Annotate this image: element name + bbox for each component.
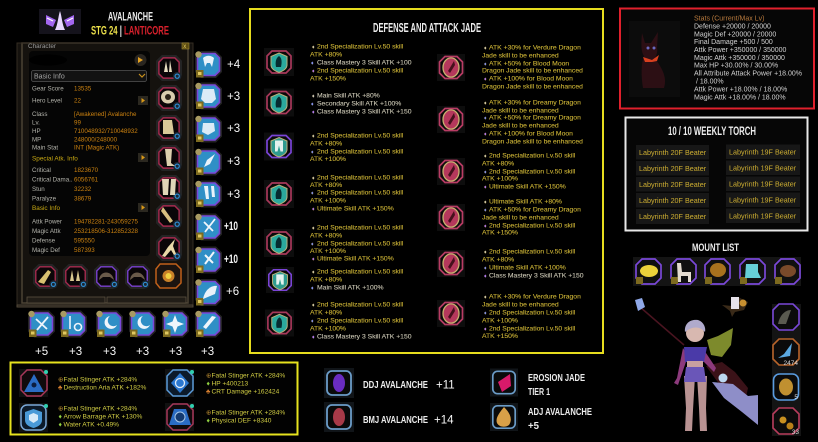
card 3: CRT Damage +162424 (212, 388, 280, 396)
jade left 7: ATK +80% (310, 310, 342, 316)
torso (684, 347, 707, 362)
enhancement levels row: +3 (136, 346, 149, 358)
stats list: 710048932/710048932 (74, 128, 138, 135)
jade left 1: ATK +80% (310, 52, 342, 58)
DDJ jade: DDJ AVALANCHE (363, 380, 428, 391)
jade right 3: ATK +100% (482, 176, 518, 182)
title: AVALANCHE (108, 10, 153, 24)
jade left 5: ATK +100% (310, 248, 346, 255)
jade right 2: Jade skill to be enhanced (482, 108, 559, 114)
jade left 7: Class Mastery 3 Skill ATK +150 (317, 334, 412, 340)
enhancement levels row: +3 (169, 346, 182, 358)
jade left 2: Main Skill ATK +80% (317, 92, 380, 100)
jade right 5 (437, 248, 584, 280)
torch badges left: Labyrinth 20F Beater (639, 164, 707, 173)
stats text: Stats (Current/Max Lv) (694, 16, 764, 22)
jade left 2: ♦ (312, 110, 315, 116)
jade right 1: ♦ (484, 62, 487, 68)
card 1: ⊕ (58, 376, 64, 384)
jade left 3: ATK +80% (310, 140, 342, 148)
jade left 7: ATK +100% (310, 326, 346, 332)
jade right 3: ♦ (484, 154, 487, 160)
stats list: 6056761 (74, 176, 99, 184)
equipment slots bottom (33, 264, 181, 289)
card 3: Fatal Stinger ATK +284% (212, 372, 285, 380)
torch badges left: Labyrinth 20F Beater (639, 196, 707, 205)
enhancement levels column: +4 (227, 59, 241, 71)
jade right 3: ATK +80% (482, 160, 514, 168)
torch badges right: Labyrinth 19F Beater (729, 164, 797, 172)
enhancement levels row: +5 (35, 346, 48, 358)
jade right 6: 2nd Specialization Lv.50 skill (489, 310, 576, 316)
DDJ jade: +11 (436, 380, 455, 392)
jade right 1: ATK +30% for Verdure Dragon (489, 44, 581, 52)
stats list: Attk Power (32, 218, 62, 226)
title (91, 10, 169, 38)
stats list: [Awakened] Avalanche (74, 111, 137, 118)
jade left 2: ♦ (312, 94, 315, 100)
stats list: 38679 (74, 196, 92, 202)
jade left 6: ♦ (311, 286, 314, 292)
card 2: ♦ (58, 422, 62, 428)
stats list: Stun (32, 186, 45, 193)
card 2 (19, 403, 142, 432)
jade left 6: ATK +80% (310, 276, 342, 284)
sword (706, 362, 758, 425)
enhancement levels column (224, 59, 241, 298)
jade left 6: 2nd Specialization Lv.50 skill (317, 268, 404, 276)
panel: defense and attack jade (250, 9, 603, 353)
torch badges left: Labyrinth 20F Beater (639, 148, 707, 157)
jade left 1: Class Mastery 3 Skill ATK +100 (317, 60, 412, 66)
jade left 1: 2nd Specialization Lv.50 skill (317, 44, 404, 50)
enhancement levels column: +6 (226, 286, 239, 298)
jade left 3 (264, 132, 404, 163)
stats list: HP (32, 128, 41, 135)
jade right 4: ATK +150% (482, 230, 518, 236)
skin icons column (195, 51, 222, 306)
hidden name (29, 54, 67, 66)
stats list: Defense (32, 238, 56, 244)
card 2: Fatal Stinger ATK +284% (64, 406, 137, 412)
arms (674, 348, 716, 385)
enhancement levels column: +10 (224, 254, 238, 266)
jade right 5: 2nd Specialization Lv.50 skill (489, 248, 576, 256)
skin icons row (28, 310, 222, 338)
jade left 1: ♦ (312, 68, 315, 74)
jade right 3: 2nd Specialization Lv.50 skill (489, 152, 576, 160)
jade right 4 (437, 198, 581, 236)
jade right 4: ♦ (484, 224, 487, 230)
jade right 1: Dragon Jade skill to be enhanced (482, 68, 583, 74)
jade right 2: ATK +50% for Dreamy Dragon (489, 114, 581, 122)
jade right 5: ♦ (484, 266, 487, 272)
enhancement levels row: +3 (103, 346, 116, 358)
jade right 5: ♦ (484, 250, 487, 256)
jade left 4: ATK +100% (310, 198, 346, 204)
jade right 6: ♦ (484, 326, 487, 332)
jade left 2: ♦ (311, 102, 314, 108)
jade left 6 (266, 267, 404, 293)
jade left 4: 2nd Specialization Lv.50 skill (317, 190, 404, 196)
staff (635, 298, 684, 345)
jade right 2 (437, 100, 583, 146)
torch badges right (726, 144, 800, 223)
stats list: Paralyze (32, 196, 57, 202)
jade right 5: ♦ (484, 274, 487, 280)
jade left 6: Main Skill ATK +100% (317, 284, 384, 292)
jade right 4: 2nd Specialization Lv.50 skill (489, 222, 576, 230)
mount list heading: MOUNT LIST (692, 242, 739, 254)
jade right 4: Ultimate Skill ATK +80% (489, 198, 562, 206)
stats text: Max HP +30.00% / 30.00% (694, 62, 778, 70)
jade right 3: 2nd Specialization Lv.50 skill (489, 168, 576, 176)
card 4 (165, 403, 285, 431)
jade right 6: ♦ (484, 310, 487, 316)
jade left 7: ♦ (312, 334, 315, 340)
jade left 3: ♦ (312, 134, 315, 140)
enhancement levels column: +3 (227, 91, 240, 103)
jade left 2: Class Mastery 3 Skill ATK +150 (317, 108, 412, 116)
card 1: Fatal Stinger ATK +284% (64, 376, 137, 384)
erosion jade: EROSION JADE (528, 373, 585, 384)
enhancement levels column: +3 (227, 189, 240, 201)
nav button (134, 54, 146, 66)
torch badges right: Labyrinth 19F Beater (729, 148, 797, 156)
ADJ jade: +5 (528, 421, 539, 432)
jade left 4: ATK +80% (310, 182, 342, 189)
pet (722, 297, 748, 317)
card 1: Destruction Aria ATK +182% (64, 384, 147, 392)
jade right 6: 2nd Specialization Lv.50 skill (489, 326, 576, 332)
stats text: All Attribute Attack Power +18.00% (694, 70, 802, 78)
jade right 6: Jade skill to be enhanced (482, 302, 559, 308)
stats text: Attk Power +18.00% / 18.00% (694, 86, 787, 94)
enhancement levels row (35, 346, 214, 358)
stats list: Basic Info (32, 205, 61, 212)
dropdown (32, 70, 146, 82)
window title: Character (28, 43, 57, 50)
torch badges left: Labyrinth 20F Beater (639, 180, 707, 189)
stats list: MP (32, 136, 41, 144)
stats list: Magic Attk (32, 228, 61, 235)
jade right 4: ♦ (484, 200, 487, 206)
jade left 6: ♦ (312, 270, 315, 276)
jade left 3: 2nd Specialization Lv.50 skill (317, 148, 404, 156)
DDJ jade (324, 368, 455, 398)
stats list: Special Atk. Info (32, 156, 78, 162)
jade left 4: Ultimate Skill ATK +150% (317, 206, 394, 212)
stats list: 32232 (74, 186, 92, 193)
card 4: ⊕ (206, 410, 212, 416)
jade right 6: ATK +100% (482, 318, 518, 324)
stats text: Attk Power +350000 / 350000 (694, 47, 787, 54)
heading: 10 / 10 WEEKLY TORCH (668, 124, 756, 138)
skirt (684, 367, 706, 382)
BMJ jade (324, 402, 454, 432)
card 3: HP +400213 (212, 380, 249, 388)
jade right 6: ATK +30% for Verdure Dragon (489, 294, 581, 300)
tab buttons (17, 297, 193, 307)
jade left 5: ♦ (312, 256, 315, 262)
stats text: Defense +20000 / 20000 (694, 24, 771, 30)
jade right 2: Jade skill to be enhanced (482, 122, 559, 130)
heading: DEFENSE AND ATTACK JADE (373, 20, 481, 35)
jade left 3: 2nd Specialization Lv.50 skill (317, 132, 404, 140)
ADJ jade: ADJ AVALANCHE (528, 407, 592, 418)
jade left 7: 2nd Specialization Lv.50 skill (317, 302, 404, 308)
jade left 5: 2nd Specialization Lv.50 skill (317, 224, 404, 232)
torch badges right: Labyrinth 19F Beater (729, 212, 797, 220)
icon: black cat (629, 21, 680, 97)
stats list: 1823670 (74, 167, 99, 174)
torch badges left (636, 145, 709, 224)
jade left 7: 2nd Specialization Lv.50 skill (317, 318, 404, 324)
erosion jade: TIER 1 (528, 387, 550, 398)
stats list: 587393 (74, 247, 95, 254)
jade right 2: ♦ (484, 100, 487, 106)
jade left 7 (265, 302, 412, 340)
jade right 4: ATK +50% for Dreamy Dragon (489, 206, 581, 214)
stats text: Magic Attk +350000 / 350000 (694, 55, 785, 62)
enhancement levels column: +3 (227, 156, 240, 168)
jade left 5: ATK +80% (310, 232, 342, 240)
stats list: Magic Def (32, 247, 60, 254)
stats list: 99 (74, 120, 81, 126)
jade right 1: Dragon Jade skill to be enhanced (482, 84, 583, 90)
stats text: Magic Def +20000 / 20000 (694, 32, 776, 38)
BMJ jade: +14 (434, 414, 454, 426)
stats list: 22 (74, 98, 81, 104)
stats text: Final Damage +500 / 500 (694, 39, 773, 46)
jade right 3 (437, 152, 576, 190)
stats list: Gear Score (32, 86, 64, 92)
stats list: INT (Magic ATK) (74, 144, 119, 152)
card 1: ♣ (58, 384, 63, 392)
jade left 4 (264, 174, 404, 212)
card 3: ♦ (206, 380, 210, 388)
stats list: Critical Dama.. (32, 176, 73, 184)
stats list: 13535 (74, 86, 92, 92)
card 1 (19, 369, 147, 397)
wings (707, 328, 733, 357)
stats list: 248000/248000 (74, 136, 118, 144)
title: STG 24 | LANTICORE (91, 24, 169, 38)
jade right 1: Jade skill to be enhanced (482, 52, 559, 60)
consumable icons: 33 (792, 429, 799, 436)
jade left 4: ♦ (311, 190, 314, 196)
jade right 2: Dragon Jade skill to be enhanced (482, 138, 583, 146)
stats list: Critical (32, 167, 51, 174)
stats list: 194782281-243059275 (74, 218, 139, 226)
jade right 3: ♦ (484, 170, 487, 176)
jade right 1 (437, 44, 583, 90)
torch badges right: Labyrinth 19F Beater (729, 180, 797, 188)
card 2: ♦ (58, 414, 62, 420)
jade left 5: 2nd Specialization Lv.50 skill (317, 240, 404, 248)
card 2: Arrow Barrage ATK +130% (64, 414, 142, 420)
jade left 4: 2nd Specialization Lv.50 skill (317, 174, 404, 182)
panel: pet stats (620, 8, 814, 108)
jade right 5: Class Mastery 3 Skill ATK +150 (489, 272, 584, 280)
stats list: Class (32, 111, 47, 118)
card 3 (165, 369, 285, 397)
stats list: Lv. (32, 120, 40, 126)
jade right 6: ♦ (484, 294, 487, 300)
jade right 4: ♦ (484, 208, 487, 214)
stats list: 595550 (74, 238, 95, 244)
jade left 1 (264, 44, 412, 82)
jade left 5: Ultimate Skill ATK +150% (317, 256, 394, 262)
jade right 5: Ultimate Skill ATK +100% (489, 264, 566, 272)
stats list: Hero Level (32, 98, 62, 104)
stats list: Main Stat (32, 144, 58, 152)
card 3: ♣ (206, 388, 211, 396)
header emblem (39, 9, 81, 34)
jade right 6: ATK +150% (482, 333, 518, 340)
consumable icons: 5 (794, 394, 798, 401)
ADJ jade (490, 403, 592, 432)
torch badges left: Labyrinth 20F Beater (639, 212, 707, 221)
legs (684, 376, 707, 431)
stats list (32, 86, 148, 254)
enhancement levels row: +3 (69, 346, 82, 358)
card 2: ⊕ (58, 406, 64, 412)
jade left 5: ♦ (312, 226, 315, 232)
character figure (635, 297, 758, 431)
jade left 3: ATK +100% (310, 156, 346, 163)
card 3: ⊕ (206, 372, 212, 380)
card 4: ♦ (206, 418, 210, 424)
jade right 1: ATK +50% for Blood Moon (489, 60, 569, 68)
panel: character window (17, 43, 193, 307)
panel: weekly torch (626, 118, 808, 230)
jade right 3: Ultimate Skill ATK +150% (489, 184, 566, 190)
jade left 1: ♦ (312, 44, 315, 50)
mount icons (633, 257, 801, 286)
jade left 4: ♦ (312, 206, 315, 212)
jade right 2: ♦ (484, 132, 487, 138)
jade right 1: ♦ (484, 46, 487, 52)
close button: x (183, 44, 186, 50)
jade left 5: ♦ (311, 242, 314, 248)
enhancement levels column: +3 (227, 123, 240, 135)
jade right 1: ♦ (484, 76, 487, 82)
hair (685, 320, 705, 332)
consumable icons: 2474 (784, 360, 798, 367)
jade right 2: ATK +30% for Dreamy Dragon (489, 100, 581, 106)
jade left 1: ATK +150% (310, 76, 346, 82)
erosion jade (490, 368, 585, 398)
jade left 7: ♦ (311, 318, 314, 324)
jade left 2: Secondary Skill ATK +100% (317, 100, 401, 108)
dropdown: Basic Info (34, 74, 65, 80)
card 4: Physical DEF +8340 (212, 418, 272, 424)
jade left 1: 2nd Specialization Lv.50 skill (317, 68, 404, 74)
equipment slots right (156, 55, 182, 261)
card 2: Water ATK +0.49% (64, 422, 119, 428)
jade left 1: ♦ (311, 60, 314, 66)
stats text: / 18.00% (694, 78, 724, 86)
jade left 2 (264, 88, 412, 116)
jade left 7: ♦ (312, 302, 315, 308)
jade right 6 (437, 294, 581, 340)
stats list: 253218506-312852328 (74, 228, 139, 235)
head (686, 324, 704, 342)
torch badges right: Labyrinth 19F Beater (729, 196, 797, 204)
card 4: Fatal Stinger ATK +284% (212, 410, 285, 416)
close button (182, 43, 189, 50)
BMJ jade: BMJ AVALANCHE (363, 415, 428, 426)
jade right 5: ATK +80% (482, 256, 514, 264)
jade right 2: ♦ (484, 116, 487, 122)
jade right 4: Jade skill to be enhanced (482, 214, 559, 222)
jade left 4: ♦ (312, 176, 315, 182)
enhancement levels row: +3 (201, 346, 214, 358)
jade right 2: ATK +100% for Blood Moon (489, 130, 573, 138)
jade left 3: ♦ (311, 150, 314, 156)
stats text (694, 16, 802, 102)
jade left 5 (264, 224, 404, 262)
stats text: Magic Attk +18.00% / 18.00% (694, 94, 786, 102)
enhancement levels column: +10 (224, 221, 238, 233)
jade right 1: ATK +100% for Blood Moon (489, 76, 573, 82)
consumable icons (772, 304, 801, 436)
panel: skill cards (10, 362, 298, 434)
jade right 3: ♦ (484, 184, 487, 190)
